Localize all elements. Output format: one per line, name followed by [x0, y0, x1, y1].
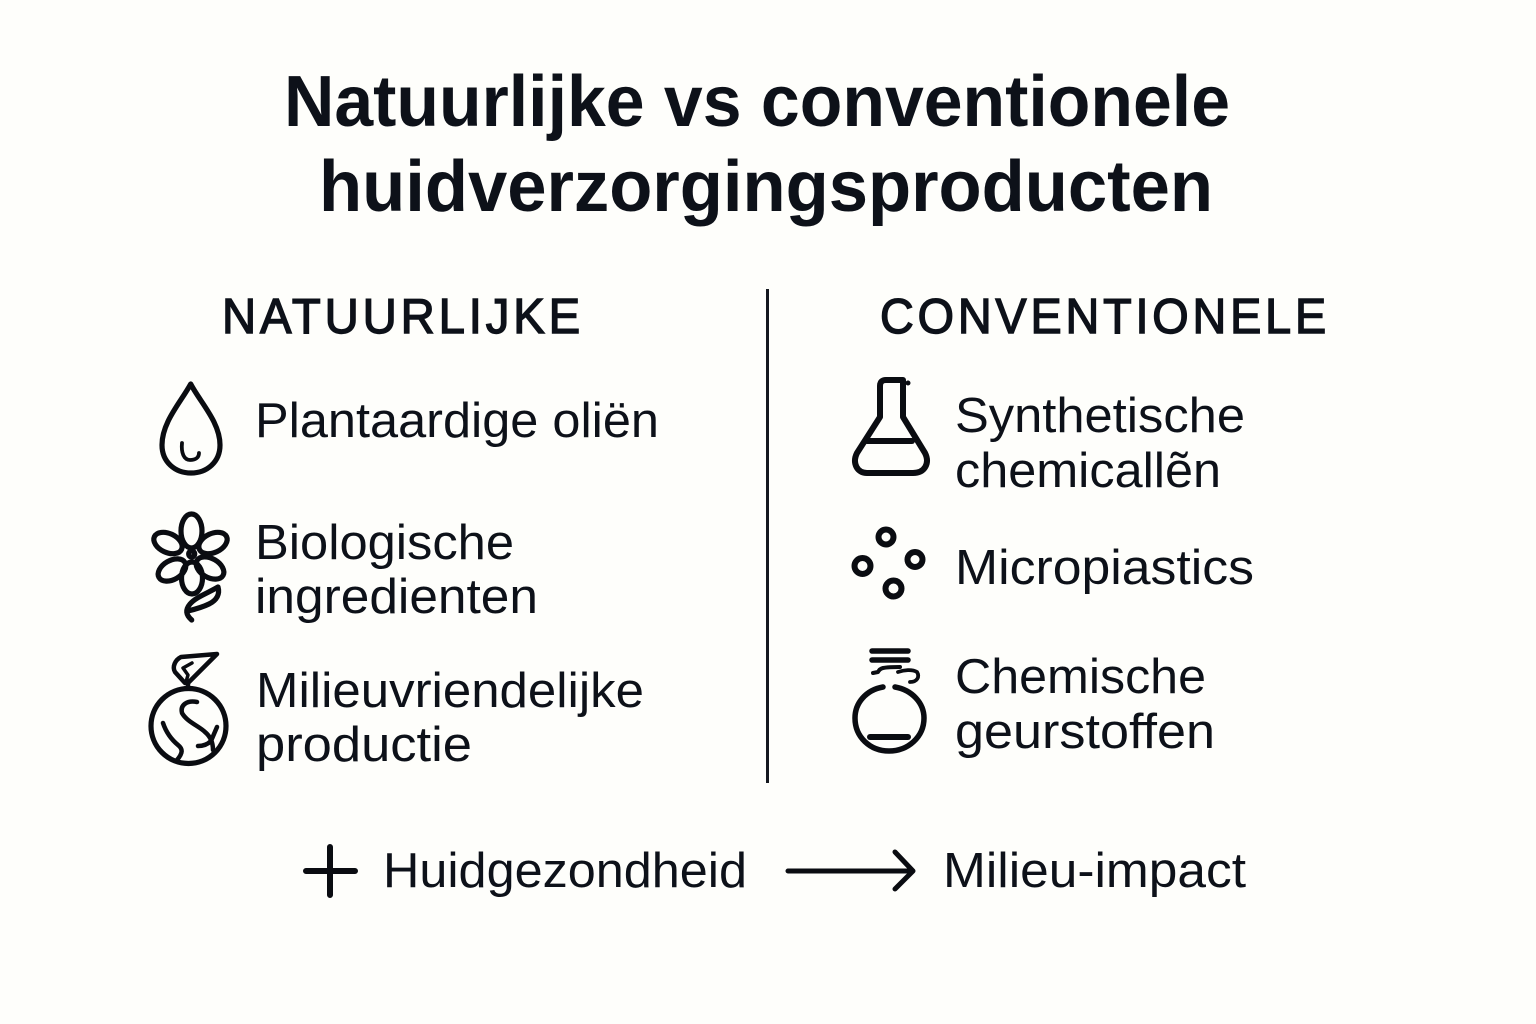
text: chemische geurstoffen: Chemische — [955, 650, 1206, 704]
title: huidverzorgingsproducten — [319, 147, 1213, 227]
icon: oil drop — [162, 384, 220, 473]
icon: plus — [306, 847, 355, 895]
icon: flask — [855, 380, 927, 473]
title: Natuurlijke vs conventionele — [284, 62, 1230, 142]
icon: microplastic particles — [854, 530, 922, 596]
text: synthetische chemicalien: Synthetische — [955, 389, 1245, 443]
text: milieuvriendelijke productie — [256, 664, 644, 772]
arrow — [788, 852, 913, 889]
text: biologische ingredienten: ingredienten — [255, 570, 538, 624]
heading: natuurlijke: NATUURLIJKE — [222, 290, 584, 344]
text: microplastics: Micropiastics — [955, 541, 1254, 595]
text: synthetische chemicalien: chemicallẽn — [955, 444, 1221, 498]
text: milieu-impact: Milieu-impact — [943, 844, 1246, 898]
icon: globe with leaf — [151, 654, 226, 764]
text: huidgezondheid: Huidgezondheid — [383, 844, 747, 898]
text: synthetische chemicalien — [955, 389, 1245, 498]
text: biologische ingredienten — [255, 516, 538, 624]
text: plantaardige olien: Plantaardige oliën — [255, 394, 659, 448]
text: milieuvriendelijke productie: productie — [256, 718, 472, 772]
title — [284, 62, 1230, 227]
icon: perfume bottle — [855, 651, 924, 751]
text: biologische ingredienten: Biologische — [255, 516, 514, 570]
icon: flower — [150, 514, 231, 620]
center divider — [766, 289, 769, 783]
heading: conventionele: CONVENTIONELE — [880, 290, 1330, 344]
text: chemische geurstoffen — [955, 650, 1215, 759]
text: milieuvriendelijke productie: Milieuvriendelijke — [256, 664, 644, 718]
text: chemische geurstoffen: geurstoffen — [955, 705, 1215, 759]
